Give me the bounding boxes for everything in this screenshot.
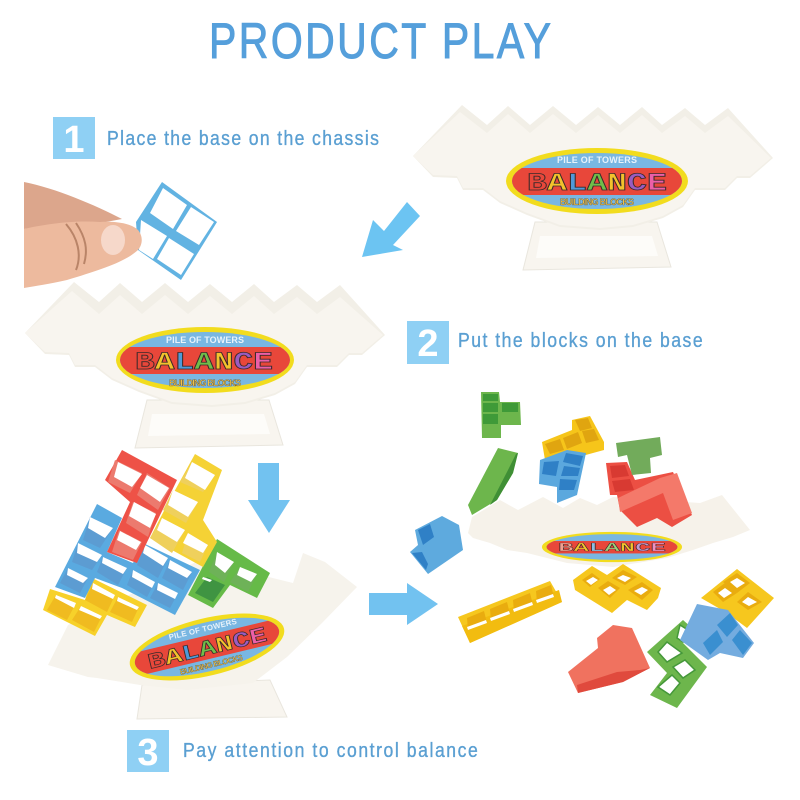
red block bottom — [568, 625, 650, 693]
blue block — [55, 504, 200, 615]
tilted base body — [48, 553, 357, 690]
yellow bottom block — [43, 578, 147, 636]
red block — [105, 450, 177, 563]
green bar block — [468, 448, 518, 515]
stand — [135, 400, 283, 448]
step 3 number badge: 3 — [137, 732, 159, 774]
yellow bar block — [458, 581, 562, 643]
scattered blocks on base — [410, 392, 774, 708]
arrow: down-left — [362, 202, 420, 257]
badge: BUILDING BLOCKS — [560, 197, 634, 207]
title: PRODUCT PLAY — [209, 13, 551, 69]
translucent base — [468, 495, 750, 567]
blue block top — [539, 450, 586, 503]
step 3 number badge — [127, 730, 169, 774]
blue cube block — [410, 516, 463, 574]
green T block right — [616, 437, 662, 475]
yellow square block right — [701, 569, 774, 628]
yellow block top — [542, 416, 604, 462]
step 2 text: Put the blocks on the base — [458, 329, 703, 351]
badge: BALANCE — [145, 623, 270, 676]
badge: PILE OF TOWERS — [168, 617, 238, 642]
badge: BALANCE — [135, 348, 273, 377]
step 2 number badge — [407, 321, 449, 365]
blue square block — [136, 182, 217, 280]
step 2 label — [407, 321, 703, 365]
step 3 label — [127, 730, 478, 774]
badge — [506, 148, 688, 214]
badge: BALANCE — [558, 542, 666, 555]
badge: PILE OF TOWERS — [557, 155, 637, 165]
base body — [25, 282, 385, 407]
badge: BUILDING BLOCKS — [179, 653, 244, 677]
step 3 text: Pay attention to control balance — [183, 739, 478, 761]
green T block top — [481, 392, 521, 438]
badge: BALANCE — [527, 169, 667, 198]
stand — [137, 680, 287, 719]
green block — [188, 539, 270, 608]
hand — [24, 182, 142, 288]
badge — [542, 532, 682, 562]
badge — [115, 327, 295, 393]
step 2 number badge: 2 — [417, 323, 439, 365]
step 1 label — [53, 117, 379, 161]
step 1 text: Place the base on the chassis — [107, 127, 379, 149]
step 1 number badge: 1 — [63, 119, 85, 161]
green square block bottom — [647, 620, 707, 708]
hand holding block — [24, 182, 217, 288]
arrow: down — [248, 463, 290, 533]
yellow tall block — [150, 454, 222, 567]
balance base: top right — [413, 105, 773, 270]
base body — [413, 105, 773, 230]
badge: PILE OF TOWERS — [166, 335, 244, 345]
stand — [523, 222, 671, 270]
balance base: middle left — [25, 282, 385, 448]
arrow: right — [369, 583, 438, 625]
badge: BUILDING BLOCKS — [169, 378, 241, 388]
blue 3D block — [680, 604, 754, 660]
step 1 number badge — [53, 117, 95, 161]
red block pile — [606, 462, 692, 527]
tilted balance base with stacked blocks — [43, 450, 357, 719]
yellow S block — [573, 564, 661, 613]
badge — [130, 614, 284, 680]
